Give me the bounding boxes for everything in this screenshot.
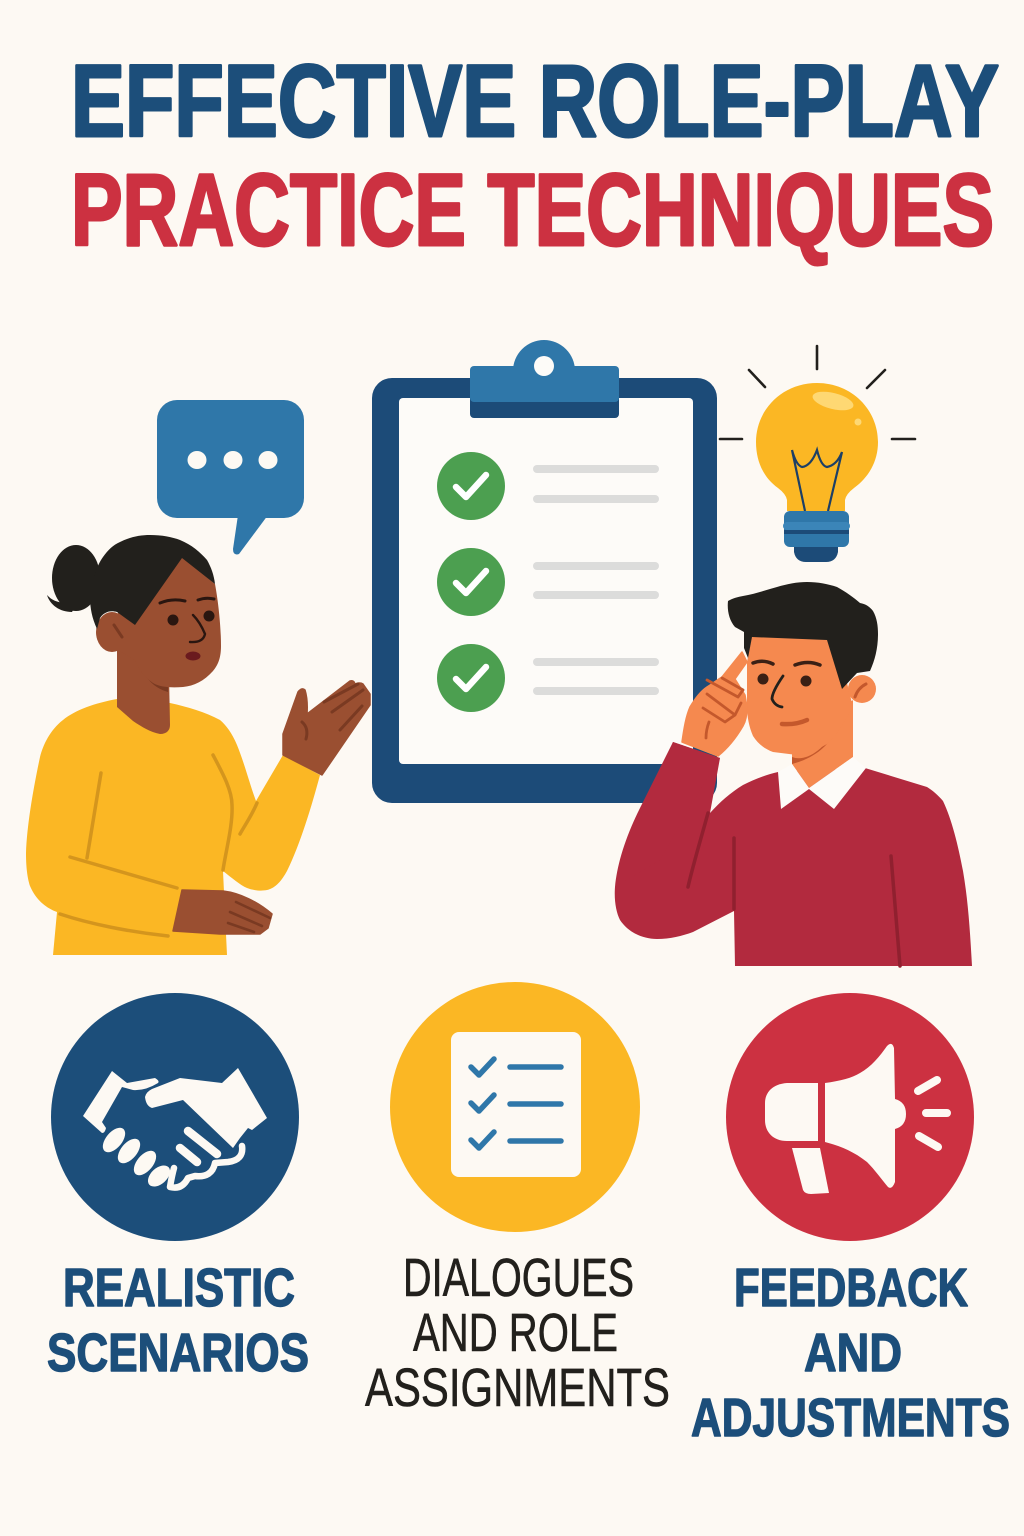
clipboard checklist (372, 340, 717, 803)
label: dialogues and role assignments: DIALOGUES (403, 1248, 634, 1308)
icon: light bulb (720, 346, 915, 562)
label: feedback and adjustments: AND (804, 1323, 902, 1383)
panel: feedback and adjustments (691, 993, 1010, 1448)
label: dialogues and role assignments: AND ROLE (413, 1303, 618, 1363)
figure: thinking man in red sweater (615, 582, 972, 966)
title (71, 44, 999, 267)
label: realistic scenarios (47, 1258, 309, 1383)
figure: woman in yellow sweater (26, 535, 370, 955)
panel: dialogues and role assignments (365, 982, 670, 1418)
label: realistic scenarios: REALISTIC (63, 1258, 295, 1318)
icon: checklist card (390, 982, 640, 1232)
label: dialogues and role assignments (365, 1248, 670, 1418)
label: dialogues and role assignments: ASSIGNMENTS (365, 1358, 670, 1418)
icon: speech bubble (157, 400, 304, 554)
icon: handshake (51, 993, 299, 1241)
label: realistic scenarios: SCENARIOS (47, 1323, 309, 1383)
label: feedback and adjustments (691, 1258, 1010, 1448)
icon: megaphone (726, 993, 974, 1241)
panel: realistic scenarios (47, 993, 309, 1383)
